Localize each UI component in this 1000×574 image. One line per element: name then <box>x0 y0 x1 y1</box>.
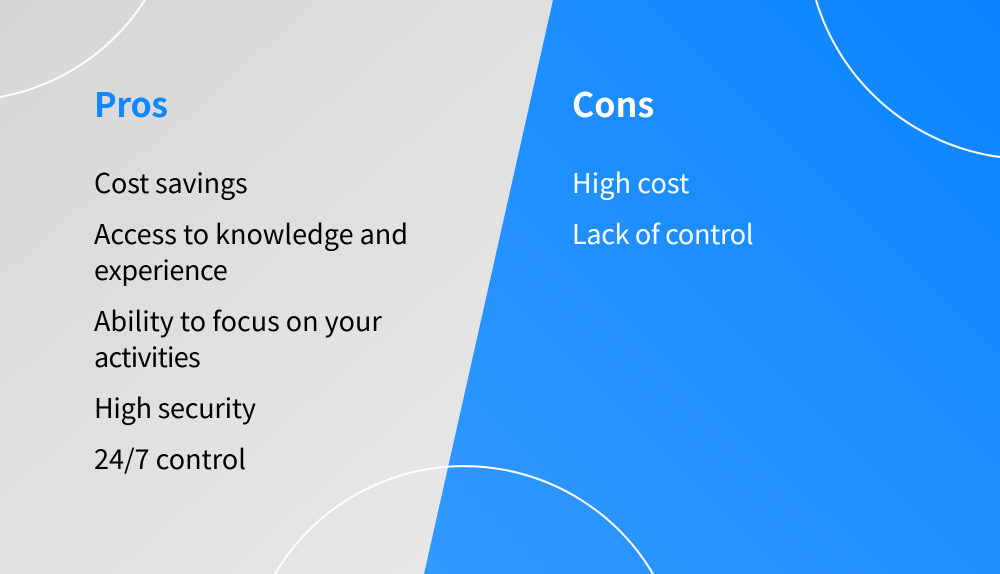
text: Ability to focus on your activities: Ability to focus on your <box>94 300 382 339</box>
panel: pros background <box>0 0 553 574</box>
text: Ability to focus on your activities: activities <box>94 336 200 375</box>
text: Ability to focus on your activities <box>94 300 382 375</box>
text: 24/7 control: 24/7 control <box>94 438 246 477</box>
text: High security: High security <box>94 387 256 426</box>
decorative circle: bottom centre <box>275 466 653 574</box>
decorative circle: top right <box>816 0 1000 157</box>
decorative circle: top left <box>0 0 145 97</box>
heading: Pros: Pros <box>94 78 168 127</box>
text: Access to knowledge and experience: Access to knowledge and <box>94 213 408 252</box>
text: Access to knowledge and experience <box>94 213 408 288</box>
text: Cost savings: Cost savings <box>94 162 247 201</box>
text: Access to knowledge and experience: experience <box>94 249 227 288</box>
heading: Cons: Cons <box>572 78 654 127</box>
text: Lack of control: Lack of control <box>572 213 753 252</box>
panel: cons background <box>424 0 1000 574</box>
text: High cost: High cost <box>572 162 689 201</box>
